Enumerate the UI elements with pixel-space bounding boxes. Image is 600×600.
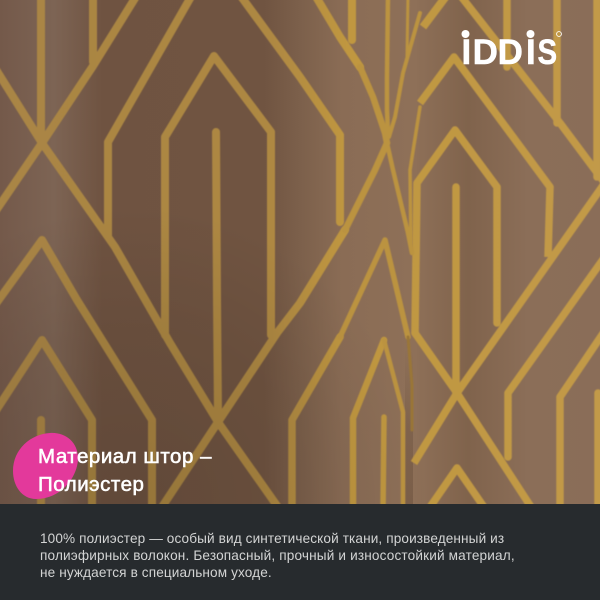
logo: IDDIS: IDDI xyxy=(462,33,536,72)
pink blob behind heading xyxy=(13,433,78,499)
thin folded lines at curtain crease xyxy=(340,0,420,510)
description text: полиэфирных волокон. Безопасный, прочный и износостойкий материал, xyxy=(40,548,515,563)
description text: не нуждается в специальном уходе. xyxy=(40,565,272,580)
panel: dark description band xyxy=(0,504,600,600)
logo: IDDIS xyxy=(462,30,561,72)
description text xyxy=(40,531,515,580)
heading: Материал штор – xyxy=(38,445,212,468)
heading: Полиэстер xyxy=(38,472,144,496)
logo: IDDIS: S xyxy=(538,33,557,72)
heading xyxy=(38,445,212,496)
description text: 100% полиэстер — особый вид синтетической ткани, произведенный из xyxy=(40,531,504,546)
